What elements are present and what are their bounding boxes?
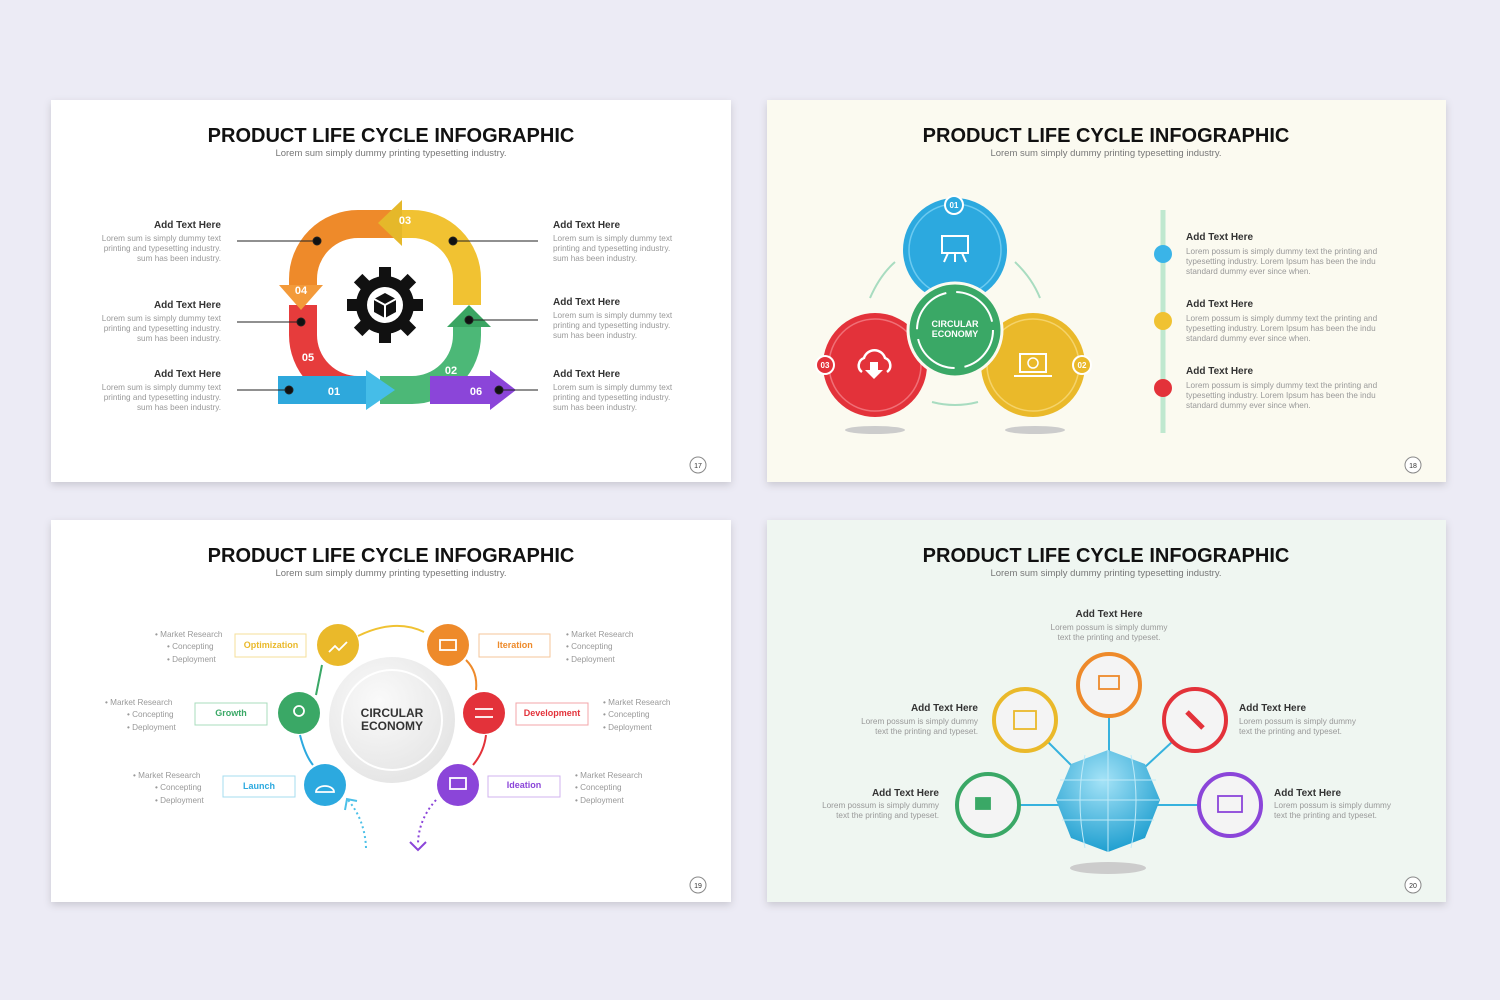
bullet lists: • Concepting (155, 783, 202, 792)
nodes (278, 624, 505, 806)
text right upper: Lorem possum is simply dummy (1239, 717, 1357, 726)
panel: slide 17 cycle arrows (51, 100, 731, 482)
text right lower: text the printing and typeset. (1274, 811, 1377, 820)
text block left 3: Add Text Here (154, 369, 221, 380)
subtitle: Lorem sum simply dummy printing typesetting industry. (990, 148, 1222, 159)
text block 1: Add Text Here (1186, 232, 1253, 243)
label boxes: Iteration (497, 640, 533, 650)
text top: Lorem possum is simply dummy (1051, 623, 1168, 632)
text block 1: standard dummy ever since when. (1186, 267, 1311, 276)
text right upper (1239, 703, 1357, 736)
center circle: ECONOMY (361, 719, 423, 733)
circle 01 blue (903, 195, 1007, 302)
label boxes: Optimization (244, 640, 298, 650)
text block 3: standard dummy ever since when. (1186, 401, 1311, 410)
text block right 2: sum has been industry. (553, 331, 637, 340)
bullet lists: • Deployment (575, 796, 625, 805)
step numbers: 02 (445, 365, 457, 377)
text block right 1: printing and typesetting industry. (553, 244, 670, 253)
step numbers: 05 (302, 352, 314, 364)
page number 17 (690, 457, 706, 473)
badges (957, 654, 1261, 836)
bullet lists: • Concepting (575, 783, 622, 792)
text left lower: text the printing and typeset. (836, 811, 939, 820)
center circle (329, 657, 455, 783)
shadows (845, 426, 1065, 434)
bullet lists: • Concepting (603, 710, 650, 719)
subtitle: Lorem sum simply dummy printing typesetting industry. (275, 568, 507, 579)
page number 17: 17 (694, 463, 702, 470)
text block right 3: Lorem sum is simply dummy text (553, 383, 673, 392)
text block left 2: Add Text Here (154, 300, 221, 311)
label boxes: Ideation (507, 780, 541, 790)
text block right 3: Add Text Here (553, 369, 620, 380)
page number 18: 18 (1409, 463, 1417, 470)
bullet lists (105, 630, 671, 805)
text block left 1: printing and typesetting industry. (104, 244, 221, 253)
cycle diagram (278, 200, 516, 410)
sphere (1056, 750, 1160, 874)
bullet lists: • Concepting (127, 710, 174, 719)
text block left 1 (102, 220, 222, 263)
label boxes: Development (524, 708, 580, 718)
label boxes: Launch (243, 781, 275, 791)
text left lower: Lorem possum is simply dummy (822, 801, 940, 810)
panel: slide 18 circular economy (767, 100, 1446, 482)
subtitle: Lorem sum simply dummy printing typesetting industry. (990, 568, 1222, 579)
bullet lists: • Concepting (566, 642, 613, 651)
text top: Add Text Here (1075, 609, 1143, 620)
connector lines (1018, 717, 1200, 805)
step numbers (295, 215, 482, 398)
text block right 3: printing and typesetting industry. (553, 393, 670, 402)
text block right 1: Add Text Here (553, 220, 620, 231)
text block 1: Lorem possum is simply dummy text the printing and (1186, 247, 1378, 256)
text right upper: text the printing and typeset. (1239, 727, 1342, 736)
text block 3: typesetting industry. Lorem Ipsum has been the indu (1186, 391, 1376, 400)
timeline (1154, 210, 1172, 433)
bullet lists: • Deployment (603, 723, 653, 732)
text left lower (822, 788, 940, 820)
text left upper: Lorem possum is simply dummy (861, 717, 979, 726)
title: PRODUCT LIFE CYCLE INFOGRAPHIC (208, 125, 574, 147)
text top: text the printing and typeset. (1058, 633, 1160, 642)
icon: gear with cube (347, 267, 423, 343)
circle 01 blue: 01 (950, 201, 959, 210)
bullet lists: • Deployment (127, 723, 177, 732)
text block right 3 (553, 369, 673, 412)
title: PRODUCT LIFE CYCLE INFOGRAPHIC (208, 545, 574, 567)
text right lower: Add Text Here (1274, 788, 1341, 799)
text block left 1: Lorem sum is simply dummy text (102, 234, 222, 243)
text left lower: Add Text Here (872, 788, 939, 799)
bullet lists: • Market Research (133, 771, 201, 780)
text block right 1: sum has been industry. (553, 254, 637, 263)
step numbers: 01 (328, 386, 340, 398)
cycle arrows (870, 262, 1040, 405)
text left upper: Add Text Here (911, 703, 978, 714)
step numbers: 06 (470, 386, 482, 398)
page number 20 (1405, 877, 1421, 893)
connectors (300, 626, 486, 850)
label boxes (195, 634, 588, 797)
title: PRODUCT LIFE CYCLE INFOGRAPHIC (923, 125, 1289, 147)
text block right 2: Add Text Here (553, 297, 620, 308)
text block 2: typesetting industry. Lorem Ipsum has been the indu (1186, 324, 1376, 333)
page number 19 (690, 877, 706, 893)
text block right 3: sum has been industry. (553, 403, 637, 412)
bullet lists: • Market Research (155, 630, 223, 639)
text top (1051, 609, 1168, 642)
center: circular economy: CIRCULAR (932, 319, 979, 329)
center: circular economy: ECONOMY (932, 329, 978, 339)
bullet lists: • Deployment (566, 655, 616, 664)
text block left 3 (102, 369, 222, 412)
text block 2: standard dummy ever since when. (1186, 334, 1311, 343)
text block right 2: Lorem sum is simply dummy text (553, 311, 673, 320)
text right lower (1274, 788, 1392, 820)
leader lines (237, 237, 538, 394)
text block left 1: sum has been industry. (137, 254, 221, 263)
text block right 1: Lorem sum is simply dummy text (553, 234, 673, 243)
bullet lists: • Concepting (167, 642, 214, 651)
text block left 1: Add Text Here (154, 220, 221, 231)
bullet lists: • Market Research (566, 630, 634, 639)
text left upper (861, 703, 979, 736)
panel: slide 20 sphere hub (767, 520, 1446, 902)
text block 1 (1186, 232, 1378, 276)
text right lower: Lorem possum is simply dummy (1274, 801, 1392, 810)
text block left 2: sum has been industry. (137, 334, 221, 343)
bullet lists: • Market Research (603, 698, 671, 707)
text block left 3: Lorem sum is simply dummy text (102, 383, 222, 392)
text block right 2 (553, 297, 673, 340)
text block left 2: printing and typesetting industry. (104, 324, 221, 333)
text block 2: Add Text Here (1186, 299, 1253, 310)
step numbers: 04 (295, 285, 308, 297)
text block 3: Lorem possum is simply dummy text the printing and (1186, 381, 1378, 390)
text block 2: Lorem possum is simply dummy text the printing and (1186, 314, 1378, 323)
circle 02 yellow: 02 (1078, 361, 1087, 370)
text block 1: typesetting industry. Lorem Ipsum has been the indu (1186, 257, 1376, 266)
bullet lists: • Market Research (575, 771, 643, 780)
center circle: CIRCULAR (361, 706, 424, 720)
page number 20: 20 (1409, 883, 1417, 890)
label boxes: Growth (215, 708, 247, 718)
circle 03 red: 03 (821, 361, 830, 370)
bullet lists: • Market Research (105, 698, 173, 707)
text block left 3: printing and typesetting industry. (104, 393, 221, 402)
text block left 2: Lorem sum is simply dummy text (102, 314, 222, 323)
circle 03 red (815, 313, 927, 417)
text block right 2: printing and typesetting industry. (553, 321, 670, 330)
step numbers: 03 (399, 215, 411, 227)
bullet lists: • Deployment (167, 655, 217, 664)
page number 18 (1405, 457, 1421, 473)
text block 2 (1186, 299, 1378, 343)
text block right 1 (553, 220, 673, 263)
center: circular economy (908, 283, 1002, 377)
subtitle: Lorem sum simply dummy printing typesetting industry. (275, 148, 507, 159)
text block left 3: sum has been industry. (137, 403, 221, 412)
text block 3 (1186, 366, 1378, 410)
text block left 2 (102, 300, 222, 343)
text block 3: Add Text Here (1186, 366, 1253, 377)
text right upper: Add Text Here (1239, 703, 1306, 714)
bullet lists: • Deployment (155, 796, 205, 805)
title: PRODUCT LIFE CYCLE INFOGRAPHIC (923, 545, 1289, 567)
circle 02 yellow (981, 313, 1092, 417)
page number 19: 19 (694, 883, 702, 890)
panel: slide 19 circular nodes (51, 520, 731, 902)
text left upper: text the printing and typeset. (875, 727, 978, 736)
